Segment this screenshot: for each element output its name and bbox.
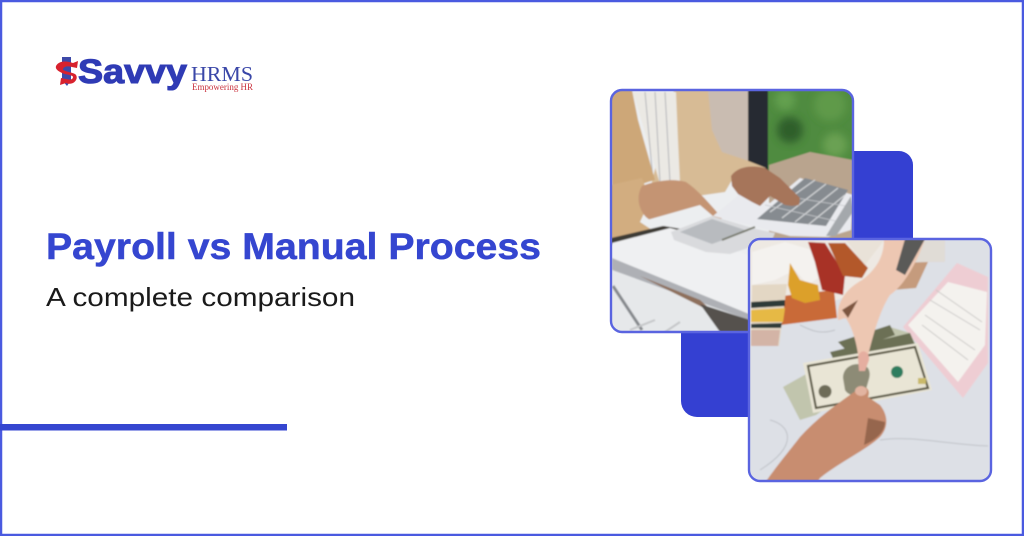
striped cloth (751, 284, 787, 346)
vein marks (760, 325, 988, 470)
photo: hands exchanging cash (749, 239, 991, 483)
photo frame 1 (611, 90, 853, 332)
back bills (783, 327, 916, 420)
notebook (612, 227, 677, 246)
logo tagline: Empowering HR (192, 83, 254, 93)
right hand (731, 167, 800, 206)
logo HRMS: HRMS (191, 62, 253, 86)
logo wordmark: Savvy (78, 53, 187, 91)
pink notebook (903, 263, 988, 398)
shirt (633, 92, 680, 184)
left hand (639, 180, 722, 225)
icon: logo emblem (56, 57, 78, 86)
subtitle: A complete comparison (46, 282, 355, 312)
upper hand (838, 239, 925, 362)
pen (613, 286, 642, 330)
accent line (0, 424, 287, 430)
blue backing block (681, 151, 913, 417)
table top (750, 240, 884, 310)
photo frame 2 (749, 239, 991, 481)
jacket right side (650, 90, 766, 197)
front bill (803, 343, 932, 413)
jacket left (612, 91, 655, 186)
title: Payroll vs Manual Process (46, 226, 541, 267)
yarn (752, 242, 818, 285)
calculator (671, 216, 775, 254)
logo (56, 53, 254, 93)
laptop (713, 178, 853, 237)
lower hand (765, 387, 886, 483)
photo: hands on calculator and laptop (611, 89, 853, 332)
